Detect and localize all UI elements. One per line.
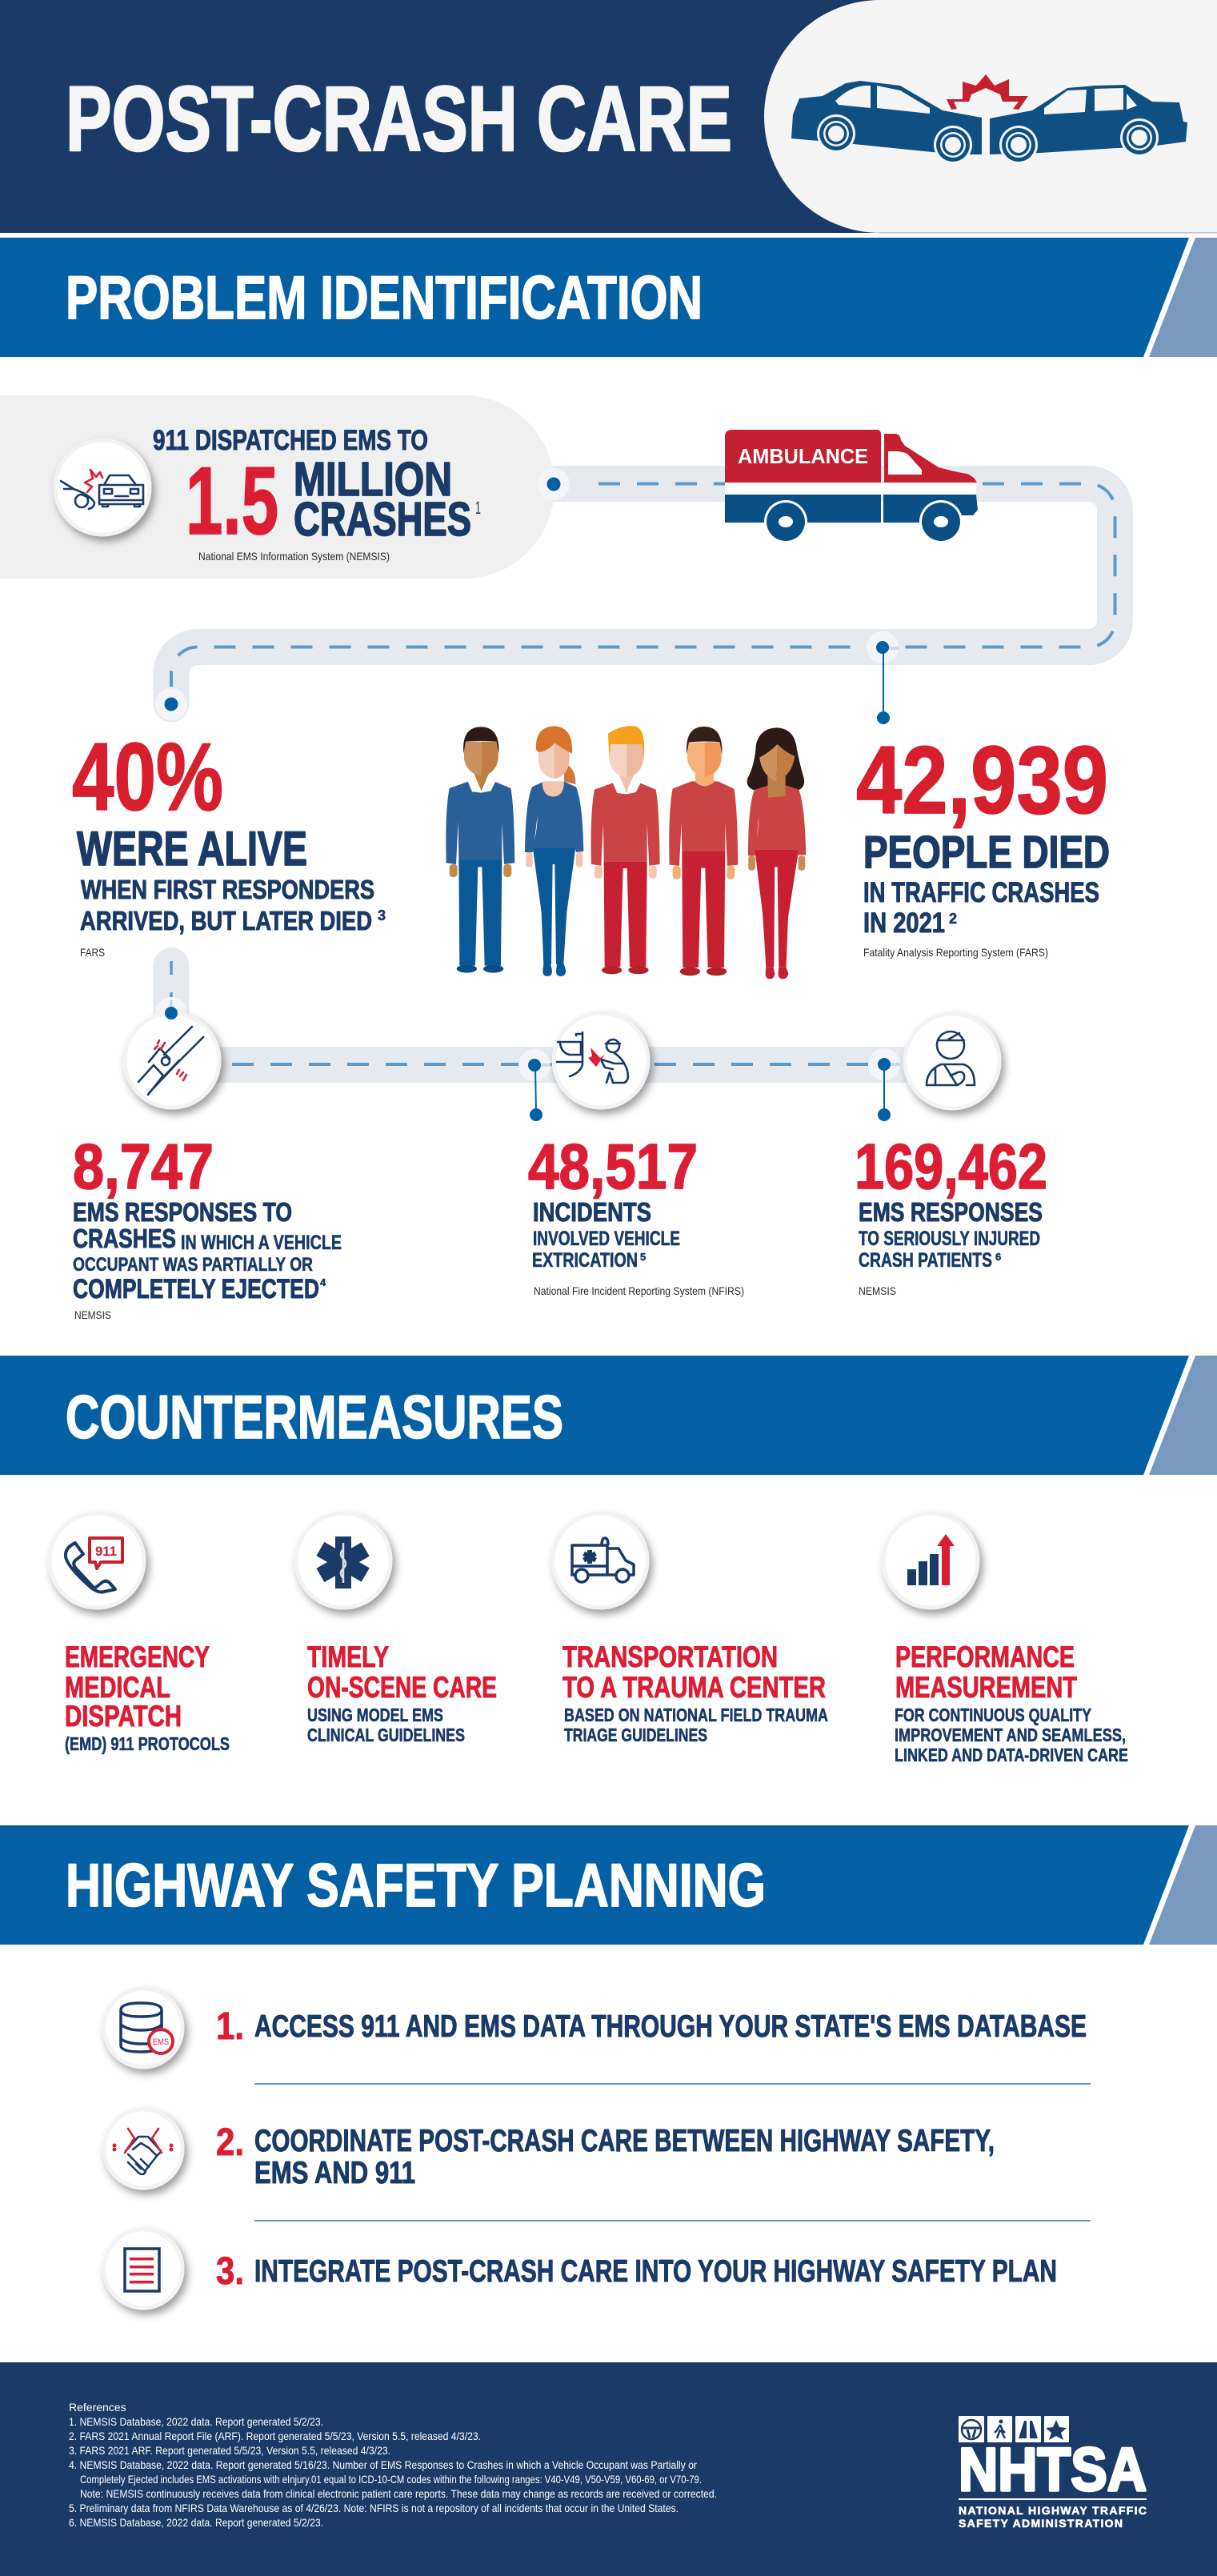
heading: HIGHWAY SAFETY PLANNING (66, 1852, 766, 1920)
stat: 40% were alive: 3 (378, 907, 386, 923)
heading: EMERGENCY (65, 1641, 210, 1673)
stat: 169,462: 169,462 (855, 1131, 1047, 1202)
person 5 (747, 727, 806, 979)
references: Note: NEMSIS continuously receives data from clinical electronic patient care reports. These data may change as records are received or corrected. (80, 2487, 717, 2500)
stat: 169,462: EMS RESPONSES (859, 1197, 1043, 1227)
icon: ambulance outline (553, 1513, 647, 1608)
section band: countermeasures (0, 1356, 1217, 1475)
references: 2. FARS 2021 Annual Report File (ARF). Report generated 5/5/23, Version 5.5, released 4/3/23. (69, 2430, 481, 2442)
references: 4. NEMSIS Database, 2022 data. Report generated 5/16/23. Number of EMS Responses to Crashes in which a Vehicle Occupant was Partially or (69, 2458, 697, 2471)
stat: 48,517: 48,517 (528, 1131, 698, 1202)
countermeasure: timely on-scene care (296, 1513, 497, 1745)
references: 3. FARS 2021 ARF. Report generated 5/5/23, Version 5.5, released 4/3/23. (69, 2444, 390, 2457)
references: 1. NEMSIS Database, 2022 data. Report generated 5/2/23. (69, 2415, 323, 2428)
text: million crashes: MILLION (294, 453, 452, 506)
countermeasure: performance measurement: LINKED AND DATA-DRIVEN CARE (895, 1745, 1128, 1765)
stat: 8,747: EMS RESPONSES TO (73, 1197, 292, 1227)
marker: road stop above ejection icon (155, 997, 187, 1029)
stat: 169,462: NEMSIS (859, 1284, 896, 1297)
icon: document (104, 2229, 182, 2308)
stat: 42,939 people died: 2 (949, 911, 957, 927)
references: References (69, 2401, 126, 2414)
stat: 8,747: OCCUPANT WAS PARTIALLY OR (73, 1254, 313, 1276)
icon: star of life (296, 1513, 390, 1608)
stat: 42,939 people died: Fatality Analysis Reporting System (FARS) (863, 946, 1048, 959)
icon: two cars crashing (791, 74, 1187, 164)
text: million crashes: 1 (475, 498, 481, 518)
description: FOR CONTINUOUS QUALITY (895, 1705, 1091, 1725)
footer (0, 2362, 1217, 2576)
countermeasure: performance measurement (883, 1513, 1128, 1765)
markers on lower road (518, 1048, 900, 1121)
stat: 169,462: CRASH PATIENTS (859, 1249, 992, 1272)
stat: 42,939 people died: 42,939 (856, 727, 1108, 834)
references (69, 2401, 717, 2529)
references: 6. NEMSIS Database, 2022 data. Report generated 5/2/23. (69, 2516, 323, 2529)
step 2: EMS AND 911 (254, 2156, 415, 2190)
stat: 8,747: 8,747 (73, 1131, 214, 1202)
stat: 169,462: 6 (995, 1251, 1001, 1263)
NHTSA logo: NHTSA (959, 2436, 1147, 2504)
heading: PROBLEM IDENTIFICATION (66, 264, 703, 332)
references: Completely Ejected includes EMS activations with eInjury.01 equal to ICD-10-CM codes within the following ranges: V40-V49, V50-V59, V60-69, or V70-79. (80, 2473, 702, 2486)
stat: 40% were alive: FARS (80, 946, 105, 959)
stat: 40% were alive: WHEN FIRST RESPONDERS (81, 875, 374, 904)
panel: 1.5 million crashes (0, 395, 554, 579)
countermeasure: transportation: TO A TRAUMA CENTER (562, 1671, 826, 1704)
illustration: group of five people (446, 726, 806, 979)
countermeasure: timely on-scene care: CLINICAL GUIDELINES (307, 1725, 465, 1745)
stat: 8,747: CRASHES (73, 1224, 176, 1253)
stat: 8,747: 4 (320, 1276, 326, 1288)
icon: database: EMS (153, 2037, 169, 2047)
countermeasure: transportation: TRIAGE GUIDELINES (564, 1725, 707, 1745)
stat: 42,939 people died: PEOPLE DIED (863, 827, 1110, 878)
icon: phone with 911 bubble: 911 (95, 1544, 117, 1559)
description: USING MODEL EMS (307, 1705, 443, 1725)
countermeasure: transportation (553, 1513, 828, 1745)
number: 1. (216, 2005, 244, 2048)
road path with dashes (171, 483, 1115, 704)
stat: 42,939 people died (856, 727, 1110, 959)
stat: 48,517: INCIDENTS (533, 1197, 651, 1227)
NHTSA logo: SAFETY ADMINISTRATION (959, 2517, 1123, 2530)
icon: injured person (905, 1014, 999, 1108)
heading: TRANSPORTATION (562, 1641, 778, 1673)
countermeasure: performance measurement: MEASUREMENT (895, 1671, 1077, 1704)
stat: 8,747: NEMSIS (74, 1308, 111, 1321)
stat: 40% were alive: 40% (72, 723, 223, 831)
stat: 42,939 people died: IN TRAFFIC CRASHES (863, 877, 1099, 908)
NHTSA logo: NATIONAL HIGHWAY TRAFFIC (959, 2504, 1147, 2517)
stat: 169,462 (855, 1131, 1047, 1297)
icon: car crash (55, 440, 150, 535)
person 2 (525, 726, 583, 976)
text: COORDINATE POST-CRASH CARE BETWEEN HIGHWAY SAFETY, (254, 2124, 995, 2158)
icon: ambulance: AMBULANCE (738, 444, 868, 468)
person 3 (591, 726, 660, 974)
stat: 48,517 (528, 1131, 744, 1297)
icon: ambulance (725, 430, 978, 543)
title: POST-CRASH CARE (66, 68, 732, 170)
step 2 (104, 2109, 995, 2190)
person 4 (669, 727, 738, 976)
section band: problem identification (0, 238, 1217, 357)
countermeasure: performance measurement: IMPROVEMENT AND SEAMLESS, (895, 1725, 1126, 1745)
stat: 48,517: INVOLVED VEHICLE (533, 1228, 680, 1250)
stat: 40% were alive (72, 723, 386, 959)
person 1 (446, 727, 514, 973)
stat: 8,747: IN WHICH A VEHICLE (181, 1232, 342, 1254)
stat: 169,462: TO SERIOUSLY INJURED (859, 1228, 1040, 1250)
heading: PERFORMANCE (895, 1641, 1075, 1673)
countermeasure: emergency medical dispatch: MEDICAL (65, 1671, 170, 1704)
stat: 8,747 (73, 1131, 342, 1321)
stat: 48,517: EXTRICATION (532, 1249, 638, 1272)
icon: rising bar chart (883, 1513, 978, 1608)
number: 1.5: 1.5 (186, 447, 278, 555)
stat: 48,517: National Fire Incident Reporting System (NFIRS) (534, 1284, 744, 1297)
icon: vehicle extrication (554, 1013, 648, 1108)
heading: TIMELY (307, 1641, 389, 1673)
stat: 8,747: COMPLETELY EJECTED (73, 1274, 319, 1304)
step 1 (104, 1989, 1087, 2067)
icon: seat belt buckle (125, 1007, 219, 1108)
icon: handshake (104, 2109, 182, 2188)
number: 3. (216, 2250, 244, 2293)
text: million crashes: CRASHES (294, 493, 471, 546)
references: 5. Preliminary data from NFIRS Data Warehouse as of 4/26/23. Note: NFIRS is not a repository of all incidents that occur in the United States. (69, 2502, 679, 2514)
countermeasure: emergency medical dispatch (50, 1513, 230, 1754)
source: NEMSIS: National EMS Information System (NEMSIS) (198, 550, 390, 563)
NHTSA logo (959, 2416, 1147, 2530)
description: BASED ON NATIONAL FIELD TRAUMA (564, 1705, 828, 1725)
stat: 40% were alive: WERE ALIVE (77, 822, 307, 875)
description: (EMD) 911 PROTOCOLS (65, 1733, 230, 1754)
countermeasure: timely on-scene care: ON-SCENE CARE (307, 1671, 497, 1704)
section band: highway safety planning (0, 1825, 1217, 1945)
icon: phone with 911 bubble (50, 1513, 144, 1608)
number: 2. (216, 2121, 244, 2164)
heading: COUNTERMEASURES (66, 1384, 563, 1452)
stat: 42,939 people died: IN 2021 (863, 907, 945, 939)
text: 911 dispatched: 911 DISPATCHED EMS TO (153, 425, 428, 456)
header banner (0, 0, 1217, 234)
countermeasure: emergency medical dispatch: DISPATCH (65, 1700, 182, 1733)
lower road with dashes (171, 961, 952, 1083)
icon: database (104, 1989, 182, 2067)
stat: 40% were alive: ARRIVED, BUT LATER DIED (80, 906, 372, 935)
dot on top of icon (165, 1007, 178, 1020)
road marker dots upper (155, 468, 899, 724)
text: million crashes (294, 453, 481, 546)
stat: 48,517: 5 (640, 1251, 646, 1263)
step 3 (104, 2229, 1057, 2308)
